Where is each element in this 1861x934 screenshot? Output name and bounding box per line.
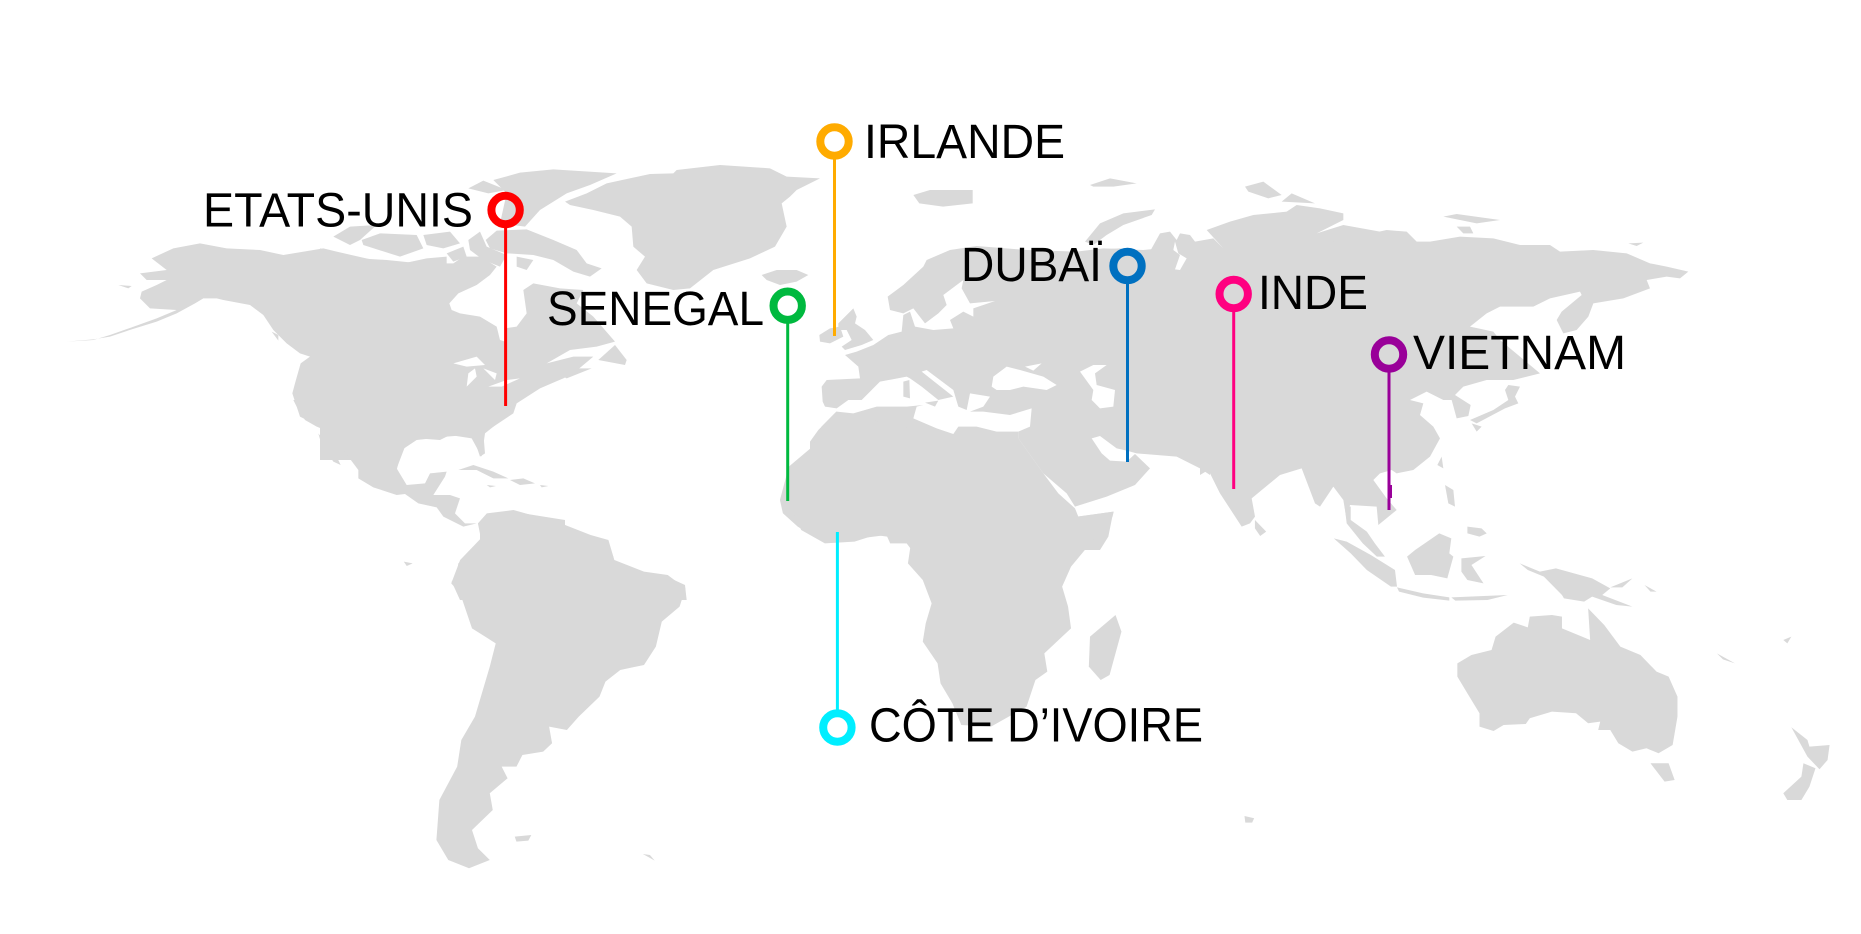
map: Canada, Arctic islands, Greenland and Iceland <box>320 165 820 460</box>
pin: Etats-Unis <box>203 184 520 406</box>
map: Europe, Middle East and north Africa <box>810 243 1210 550</box>
map: Mexico, Central America and Caribbean <box>293 400 687 600</box>
map: South America and southern Africa <box>404 500 1121 868</box>
map: northern Russia and Arctic islands <box>1080 178 1380 320</box>
map: Svalbard and West Africa <box>780 190 973 534</box>
map: Oceania and South-East Asia <box>1244 507 1830 823</box>
pin: Côte d'Ivoire <box>823 532 1203 752</box>
pin: Irlande: IRLANDE <box>864 116 1065 169</box>
pin: Inde: INDE <box>1258 267 1368 320</box>
pin: Vietnam <box>1375 327 1626 510</box>
pin: Senegal <box>547 283 802 501</box>
map: Asia, Far East, Japan and Philippines <box>1200 214 1688 527</box>
pin: Côte d'Ivoire: CÔTE D’IVOIRE <box>869 698 1203 752</box>
pin: Senegal: SENEGAL <box>547 283 764 336</box>
pin: Vietnam: VIETNAM <box>1413 327 1626 380</box>
pin: Etats-Unis: ETATS-UNIS <box>203 184 473 238</box>
pin: Inde <box>1220 267 1368 489</box>
pin: Dubaï <box>961 239 1142 462</box>
pin: Irlande <box>820 116 1065 336</box>
pin: Dubaï: DUBAÏ <box>961 239 1103 292</box>
map: Alaska and western North America <box>67 243 447 470</box>
world map landmasses <box>67 165 1830 868</box>
